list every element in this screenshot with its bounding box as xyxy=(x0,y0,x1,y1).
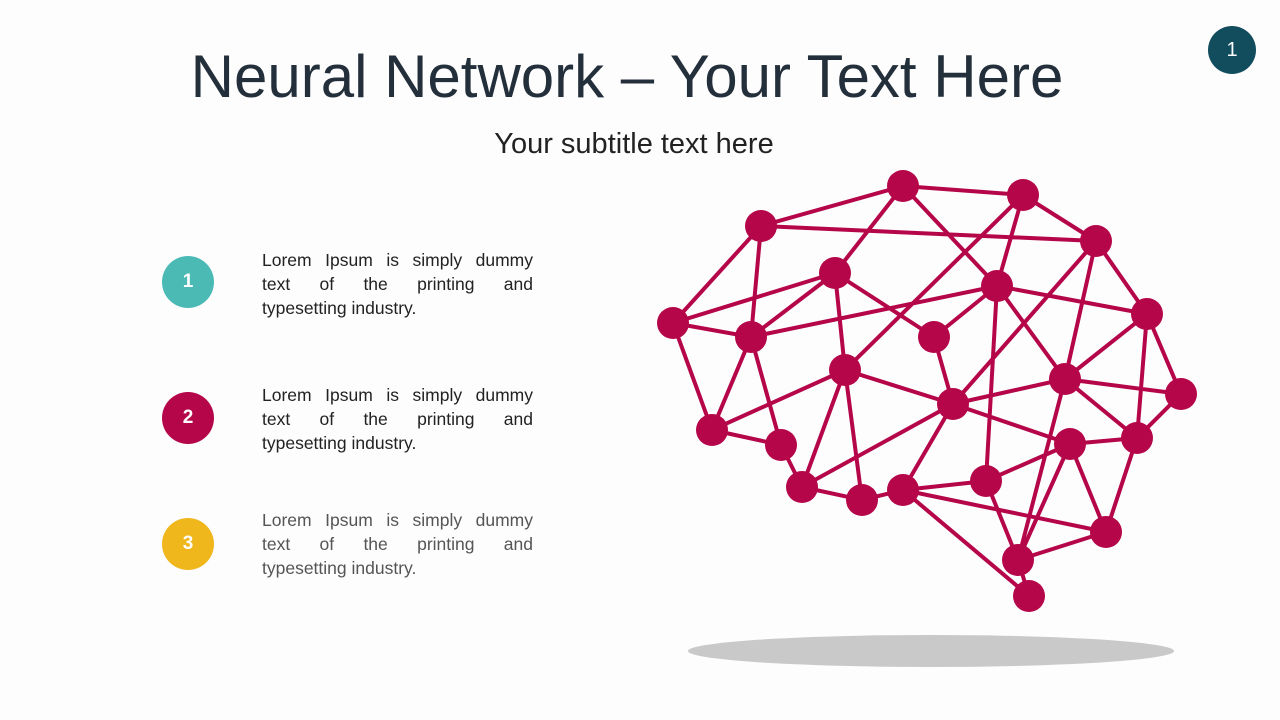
text 3: typesetting industry. xyxy=(262,558,416,578)
text 1: typesetting industry. xyxy=(262,298,416,318)
text 3: Lorem Ipsum is simply dummy xyxy=(262,510,533,530)
item 2 xyxy=(162,385,533,453)
text 2: typesetting industry. xyxy=(262,433,416,453)
item 1 xyxy=(162,250,533,318)
circle 3: 3 xyxy=(183,533,193,554)
text 3: text of the printing and xyxy=(262,534,533,554)
text 2: text of the printing and xyxy=(262,409,533,429)
text 3 xyxy=(262,510,533,578)
title: Neural Network – Your Text Here xyxy=(191,43,1063,110)
circle 2: 2 xyxy=(183,407,193,428)
text 2: Lorem Ipsum is simply dummy xyxy=(262,385,533,405)
network edges xyxy=(673,186,1181,596)
circle 1 xyxy=(162,256,214,308)
subtitle: Your subtitle text here xyxy=(494,128,774,160)
page number badge: 1 xyxy=(1226,39,1238,61)
text 1 xyxy=(262,250,533,318)
text 1: Lorem Ipsum is simply dummy xyxy=(262,250,533,270)
circle 3 xyxy=(162,518,214,570)
network nodes xyxy=(657,170,1197,612)
circle 1: 1 xyxy=(183,271,193,292)
page number badge xyxy=(1208,26,1256,74)
item 3 xyxy=(162,510,533,578)
shadow ellipse xyxy=(688,635,1174,667)
text 2 xyxy=(262,385,533,453)
circle 2 xyxy=(162,392,214,444)
text 1: text of the printing and xyxy=(262,274,533,294)
